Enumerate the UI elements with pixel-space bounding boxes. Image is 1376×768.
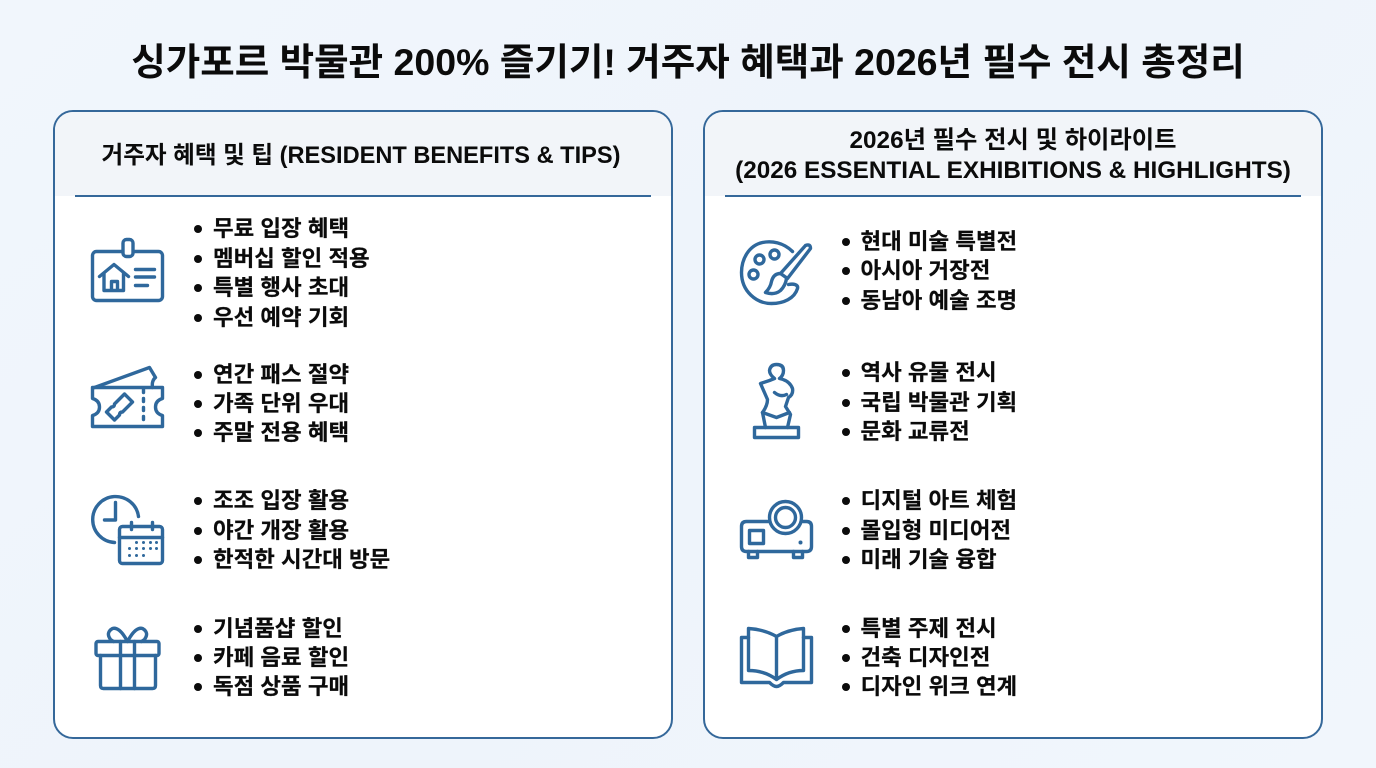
icon: tickets	[90, 366, 164, 428]
group: historic artifacts: 국립 박물관 기획	[860, 390, 1017, 415]
group: digital art: 미래 기술 융합	[860, 547, 997, 572]
group: digital art: 몰입형 미디어전	[860, 518, 1011, 543]
panel heading: resident benefits: 거주자 혜택 및 팁 (RESIDENT BENEFITS & TIPS)	[102, 143, 620, 169]
group: pass savings	[90, 362, 349, 445]
group: shop discounts: 독점 상품 구매	[213, 674, 349, 699]
group: historic artifacts: 문화 교류전	[860, 419, 970, 444]
group: modern art: 아시아 거장전	[860, 258, 990, 283]
icon: open book	[740, 626, 814, 688]
group: modern art	[740, 229, 1017, 313]
list: shop discounts: 기념품샵 할인	[213, 616, 343, 641]
group: membership benefits: 멤버십 할인 적용	[213, 246, 370, 271]
group: time-based visits: 야간 개장 활용	[213, 518, 349, 543]
panel: essential exhibitions	[703, 110, 1323, 739]
icon: gift box	[94, 626, 161, 690]
group: membership benefits: 특별 행사 초대	[213, 275, 349, 300]
icon: clock and calendar	[91, 494, 164, 566]
panel heading: essential exhibitions: 2026년 필수 전시 및 하이라이트	[850, 127, 1176, 154]
group: membership benefits: 우선 예약 기회	[213, 305, 349, 330]
group: historic artifacts	[752, 360, 1017, 444]
icon: resident ID card	[90, 238, 164, 302]
icon: palette and brush	[740, 240, 812, 306]
group: time-based visits: 한적한 시간대 방문	[213, 547, 390, 572]
group: special themes: 건축 디자인전	[860, 645, 990, 670]
list: pass savings: 연간 패스 절약	[213, 362, 349, 387]
panel heading: essential exhibitions: (2026 ESSENTIAL EXHIBITIONS & HIGHLIGHTS)	[735, 157, 1291, 184]
list: membership benefits: 무료 입장 혜택	[213, 216, 349, 241]
panel: resident benefits	[53, 110, 673, 739]
group: pass savings: 주말 전용 혜택	[213, 420, 349, 445]
title: 싱가포르 박물관 200% 즐기기! 거주자 혜택과 2026년 필수 전시 총정리	[131, 41, 1245, 83]
icon: torso statue	[752, 362, 800, 440]
group: pass savings: 가족 단위 우대	[213, 391, 349, 416]
list: special themes: 특별 주제 전시	[860, 616, 997, 641]
icon: projector	[740, 500, 814, 560]
group: membership benefits	[90, 216, 370, 330]
group: shop discounts	[94, 616, 349, 699]
list: time-based visits: 조조 입장 활용	[213, 488, 349, 513]
group: modern art: 동남아 예술 조명	[860, 288, 1017, 313]
group: shop discounts: 카페 음료 할인	[213, 645, 349, 670]
group: time-based visits	[91, 488, 390, 572]
list: historic artifacts: 역사 유물 전시	[860, 360, 997, 385]
group: special themes: 디자인 위크 연계	[860, 674, 1017, 699]
group: digital art	[740, 488, 1017, 572]
list: digital art: 디지털 아트 체험	[860, 488, 1017, 513]
panel heading: essential exhibitions	[705, 112, 1321, 196]
group: special themes	[740, 616, 1017, 699]
list: modern art: 현대 미술 특별전	[860, 229, 1017, 254]
panel heading: resident benefits	[55, 112, 671, 196]
